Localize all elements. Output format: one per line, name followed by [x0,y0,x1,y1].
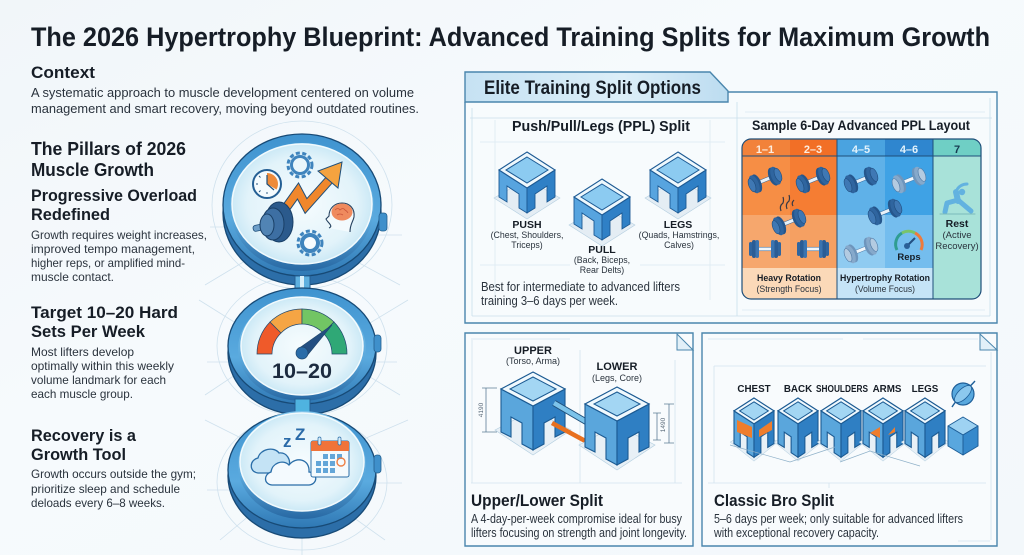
schedule table [742,139,981,299]
diagram: pull block: Rear Delts) [580,265,624,275]
text block: hard sets: each muscle group. [31,387,133,401]
text block: progressive overload: higher reps, or amplified mind- [31,256,185,270]
icon: gear bottom [298,231,322,255]
text block: context [31,63,419,116]
text block: recovery: deloads every 6–8 weeks. [31,496,165,510]
icon: brain head [326,203,354,232]
panel: classic bro split [702,333,997,546]
icon: globe [952,381,975,407]
table day headers: 1–1 [756,144,774,156]
label: upper: (Torso, Arma) [506,356,560,366]
diagram: lower block [579,387,655,470]
diagram: pull block: (Back, Biceps, [574,255,630,265]
diagram: legs block: Calves) [664,240,694,250]
text block: hard sets: Sets Per Week [31,322,146,341]
icon: growth arrow [283,162,342,212]
text block: upper lower description: lifters focusing on strength and joint longevity. [471,526,687,540]
icon: clouds [251,449,316,485]
diagram: upper block [495,372,571,455]
medallion: progressive overload [223,134,387,285]
dimensions: 4190 [478,402,485,417]
diagram: five split blocks [730,398,949,466]
text block: recovery: Recovery is a [31,426,137,445]
label: upper: UPPER [514,345,552,357]
heavy rotation caption: Heavy Rotation [757,273,821,284]
text block: bro split description: Classic Bro Split [714,491,834,510]
PPL description [481,280,680,308]
text block: hard sets: Target 10–20 Hard [31,303,178,322]
table day headers: 7 [954,144,960,156]
text block: progressive overload: improved tempo management, [31,242,195,256]
label: lower: (Legs, Core) [592,373,642,383]
PPL description: Best for intermediate to advanced lifters [481,280,680,294]
icon: sleep letters [283,425,305,451]
connector: bottom [295,399,310,415]
diagram: legs block [639,152,719,250]
section tab heading: Elite Training Split Options [484,78,701,99]
diagram: linking bars [552,403,603,443]
text block: context: management and smart recovery, moving beyond outdated routines. [31,101,419,116]
text block: hard sets: Most lifters develop [31,345,134,359]
hypertrophy rotation caption [840,273,930,295]
text block: context: A systematic approach to muscle development centered on volume [31,85,414,100]
PPL description: training 3–6 days per week. [481,294,618,308]
dimensions: 1490 [660,417,667,432]
text block: progressive overload: Redefined [31,205,110,224]
table day headers: 4–5 [852,144,870,156]
text block: progressive overload: Progressive Overload [31,186,197,205]
rest label: (Active [942,230,972,241]
label: upper [506,345,560,366]
text block: bro split description [713,491,963,540]
text block: bro split description: 5–6 days per week; only suitable for advanced lifters [714,512,963,526]
hypertrophy rotation caption: (Volume Focus) [855,284,915,295]
icon: weight plates [253,202,293,242]
muscle group labels: LEGS [912,384,939,395]
text block: hard sets: optimally within this weekly [31,359,174,373]
muscle group labels: SHOULDERS [816,384,868,395]
diagram: push block: Triceps) [511,240,543,250]
diagram: legs block: (Quads, Hamstrings, [639,230,719,240]
icon: reps gauge [896,231,922,250]
text block: recovery: Growth Tool [31,445,126,464]
rest label [935,218,979,252]
muscle group labels: CHEST [737,384,771,395]
icon: yoga rest figure [940,184,975,214]
text block: upper lower description [471,491,687,540]
table day headers: 4–6 [900,144,918,156]
panel: upper lower split [465,333,693,546]
text block: progressive overload: Growth requires weight increases, [31,228,207,242]
heavy rotation caption [756,273,822,295]
text block: progressive overload: muscle contact. [31,270,114,284]
gauge value: 10–20 [272,360,332,383]
table day headers [756,144,960,156]
text block: recovery [31,426,196,510]
text block: bro split description: with exceptional recovery capacity. [713,526,879,540]
table day headers: 2–3 [804,144,822,156]
panel: elite training split options [465,72,997,323]
icon: calendar [311,437,349,477]
medallion: recovery [228,411,381,538]
label: reps: Reps [897,252,921,263]
rest label: Rest [946,218,969,230]
icon: clock [253,170,281,198]
icon: sleep letters: z [283,432,292,451]
connector: top [295,276,310,296]
diagram: push block [491,152,563,250]
heading: pillars: The Pillars of 2026 [31,139,186,159]
medallion: weekly sets gauge [228,288,381,415]
muscle group labels [737,384,939,395]
dimensions [478,388,674,443]
icon: sleep letters: Z [295,425,305,444]
diagram: pull block [569,179,635,275]
icon: gear top [288,153,312,177]
hypertrophy rotation caption: Hypertrophy Rotation [840,273,930,284]
text block: context: Context [31,63,95,82]
diagram: legs block: LEGS [664,219,692,231]
icon: cube [948,417,978,455]
diagram: pull block: PULL [588,244,616,256]
text block: hard sets [31,303,178,401]
heading: sample layout: Sample 6-Day Advanced PPL Layout [752,118,970,133]
text block: recovery: Growth occurs outside the gym; [31,467,196,481]
muscle group labels: ARMS [873,384,902,395]
section tab heading [465,72,728,102]
diagram: push block: PUSH [512,219,542,231]
label: lower [592,361,642,383]
heavy rotation caption: (Strength Focus) [756,284,822,295]
heading: pillars [31,139,186,180]
icon: effort flames [780,195,794,211]
title: The 2026 Hypertrophy Blueprint: Advanced Training Splits for Maximum Growth [31,22,990,52]
heading: pillars: Muscle Growth [31,160,154,180]
text block: hard sets: volume landmark for each [31,373,166,387]
label: lower: LOWER [597,361,638,373]
text block: recovery: prioritize sleep and schedule [31,482,180,496]
gauge chart [257,309,347,359]
rest label: Recovery) [935,241,979,252]
icons: dumbbells [745,165,929,265]
text block: upper lower description: Upper/Lower Split [471,491,603,510]
heading: PPL split: Push/Pull/Legs (PPL) Split [512,119,690,135]
muscle group labels: BACK [784,384,812,395]
text block: progressive overload [31,186,207,284]
text block: upper lower description: A 4-day-per-week compromise ideal for busy [471,512,683,526]
diagram: push block: (Chest, Shoulders, [491,230,563,240]
